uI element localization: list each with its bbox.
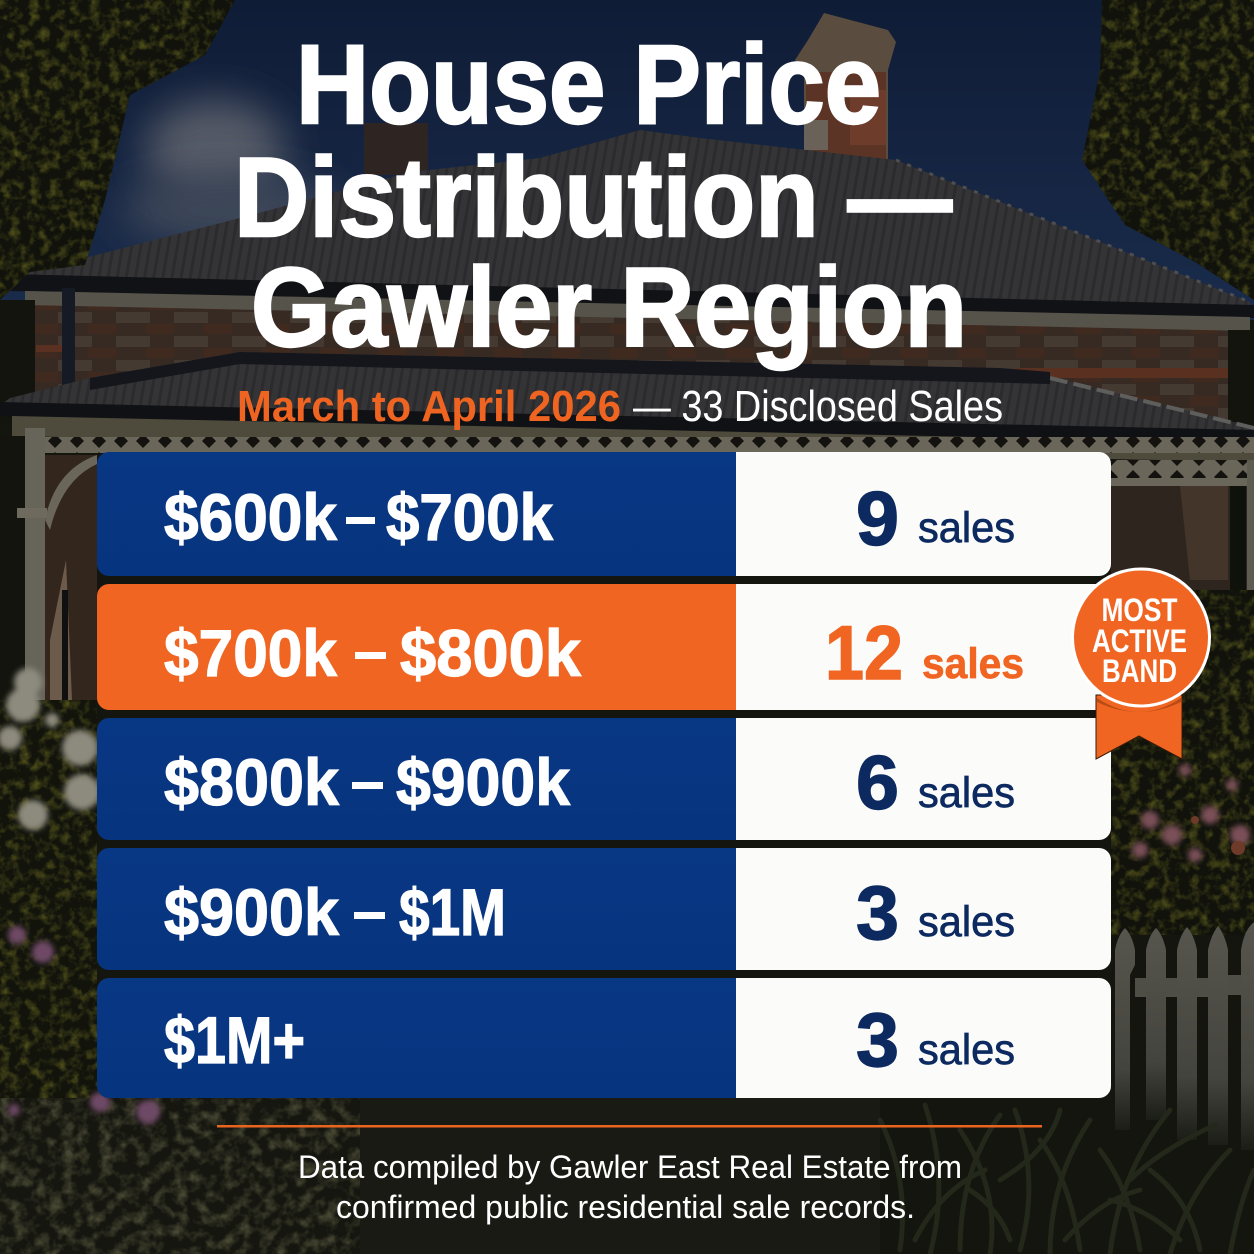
row: $800k-$900k, 6 sales — [97, 718, 1111, 840]
title — [234, 22, 967, 370]
footer source note: confirmed public residential sale records. — [336, 1189, 915, 1225]
subtitle — [237, 382, 1003, 431]
row: $600k-$700k, 9 sales: $700k — [386, 480, 553, 554]
row: $700k-$800k, 12 sales (highlighted): $800k — [400, 616, 581, 690]
footer divider — [217, 1125, 1042, 1128]
badge: most active band: MOST — [1102, 592, 1178, 628]
badge: most active band: BAND — [1102, 653, 1177, 689]
title: House Price — [296, 22, 881, 147]
row: $900k-$1M, 3 sales: sales — [918, 898, 1015, 946]
row: $600k-$700k, 9 sales: sales — [918, 504, 1015, 552]
row: $600k-$700k, 9 sales — [97, 452, 1111, 576]
row: $700k-$800k, 12 sales (highlighted) — [97, 584, 1111, 710]
row: $600k-$700k, 9 sales: $600k — [164, 480, 337, 554]
row: $900k-$1M, 3 sales: 3 — [856, 871, 899, 956]
row: $1M+, 3 sales: 3 — [856, 998, 899, 1083]
subtitle: — 33 Disclosed Sales — [633, 382, 1003, 431]
row: $700k-$800k, 12 sales (highlighted): sales — [922, 640, 1024, 688]
row: $900k-$1M, 3 sales: $900k — [164, 875, 339, 949]
row: $800k-$900k, 6 sales: $900k — [396, 745, 570, 819]
row: $900k-$1M, 3 sales — [97, 848, 1111, 970]
row: $800k-$900k, 6 sales: sales — [918, 769, 1015, 817]
row: $800k-$900k, 6 sales: 6 — [856, 741, 899, 826]
row: $1M+, 3 sales: $1M+ — [164, 1003, 305, 1077]
subtitle: March to April 2026 — [237, 382, 621, 431]
row: $800k-$900k, 6 sales: $800k — [164, 745, 339, 819]
footer source note: Data compiled by Gawler East Real Estate from — [298, 1149, 962, 1185]
row: $1M+, 3 sales — [97, 978, 1111, 1098]
row: $700k-$800k, 12 sales (highlighted): $700k — [164, 616, 337, 690]
footer source note — [298, 1149, 962, 1225]
badge: most active band — [1072, 569, 1210, 759]
row: $700k-$800k, 12 sales (highlighted): 12 — [825, 611, 903, 696]
title: Distribution — — [234, 135, 952, 260]
badge: most active band: ACTIVE — [1092, 623, 1187, 659]
row: $900k-$1M, 3 sales: $1M — [399, 875, 506, 949]
title: Gawler Region — [251, 245, 967, 370]
row: $600k-$700k, 9 sales: 9 — [856, 477, 899, 562]
row: $1M+, 3 sales: sales — [918, 1026, 1015, 1074]
